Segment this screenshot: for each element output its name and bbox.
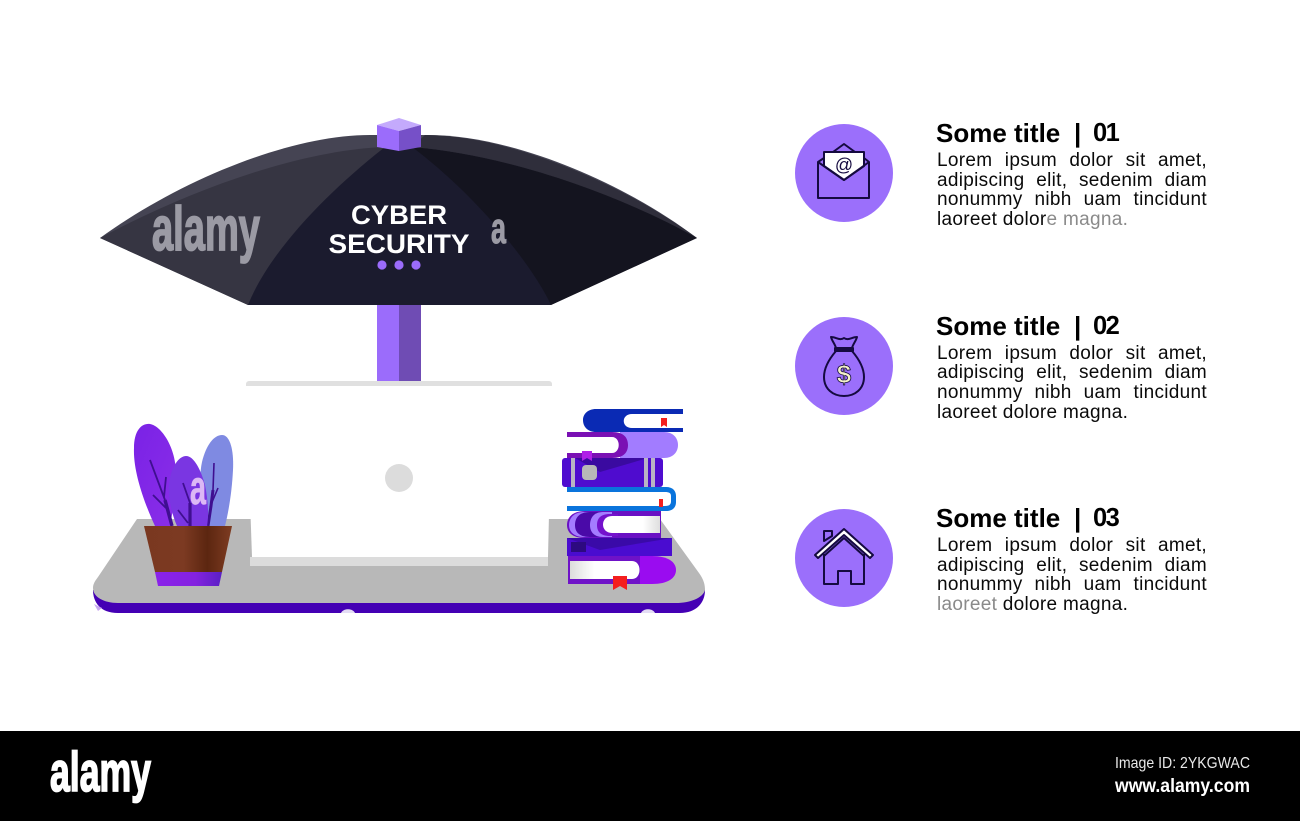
- watermark on umbrella: [152, 195, 506, 264]
- watermark on plant: a: [190, 462, 206, 515]
- heading 3: [936, 503, 1119, 533]
- book 6: [567, 538, 672, 556]
- body text 2: adipiscing elit, sedenim diam: [937, 362, 1207, 383]
- body text 3: adipiscing elit, sedenim diam: [937, 555, 1207, 576]
- body text 3: Lorem ipsum dolor sit amet,: [937, 535, 1207, 556]
- heading 1: |: [1074, 118, 1081, 148]
- icon: money bag: $: [837, 359, 852, 389]
- flower pot: [144, 526, 232, 586]
- step 1 circle with envelope icon: [795, 124, 893, 222]
- umbrella label: CYBER: [351, 200, 447, 230]
- body text 1: Lorem ipsum dolor sit amet,: [937, 150, 1207, 171]
- heading 1: [936, 118, 1120, 148]
- book 7: [568, 556, 676, 590]
- body text 1: laoreet dolore magna.: [937, 209, 1128, 230]
- text block 3: [936, 503, 1207, 615]
- stack of books: [562, 409, 683, 590]
- step 3 circle with house icon: [795, 509, 893, 607]
- footer url: www.alamy.com: [1114, 776, 1250, 797]
- book 5: [567, 511, 661, 538]
- body text 2: [937, 342, 1207, 423]
- book 2: [567, 432, 678, 461]
- body text 3: laoreet dolore magna.: [937, 594, 1128, 615]
- footer logo: alamy: [50, 740, 151, 803]
- heading 1: 01: [1093, 119, 1118, 147]
- heading 2: [936, 310, 1119, 341]
- heading 3: 03: [1093, 504, 1118, 532]
- heading 2: 02: [1093, 312, 1118, 340]
- body text 2: laoreet dolore magna.: [937, 402, 1128, 423]
- umbrella finial cube: [377, 118, 421, 151]
- book 3: [562, 458, 663, 487]
- icon: envelope: @: [835, 155, 853, 175]
- watermark on umbrella: alamy: [152, 195, 260, 264]
- leaf: blue: [200, 435, 233, 526]
- umbrella canopy: [100, 118, 697, 305]
- body text 3: nonummy nibh uam tincidunt: [937, 574, 1207, 595]
- heading 1: Some title: [936, 118, 1060, 148]
- text block 1: [936, 118, 1207, 230]
- watermark on umbrella: a: [491, 204, 506, 253]
- leaf: large purple: [134, 424, 176, 526]
- body text 2: nonummy nibh uam tincidunt: [937, 382, 1207, 403]
- heading 2: |: [1074, 310, 1081, 340]
- laptop: [246, 381, 552, 566]
- table: [93, 519, 705, 613]
- body text 1: adipiscing elit, sedenim diam: [937, 170, 1207, 191]
- footer image id: Image ID: 2YKGWAC: [1115, 755, 1250, 772]
- body text 3: [937, 535, 1207, 615]
- leaf: middle: [169, 456, 208, 526]
- book 4: [567, 487, 676, 511]
- body text 2: Lorem ipsum dolor sit amet,: [937, 342, 1207, 364]
- body text 1: nonummy nibh uam tincidunt: [937, 189, 1207, 210]
- footer bar: [0, 731, 1300, 821]
- umbrella pole: [377, 300, 421, 381]
- text block 2: [936, 310, 1207, 423]
- plant: [134, 424, 233, 586]
- book 1: [583, 409, 683, 432]
- heading 3: Some title: [936, 503, 1060, 533]
- heading 2: Some title: [936, 310, 1060, 340]
- umbrella label: [328, 200, 470, 270]
- body text 1: [937, 150, 1207, 230]
- icon: house: [815, 529, 873, 584]
- step 2 circle with money bag icon: [795, 317, 893, 415]
- umbrella label: SECURITY: [328, 229, 470, 259]
- heading 3: |: [1074, 503, 1081, 533]
